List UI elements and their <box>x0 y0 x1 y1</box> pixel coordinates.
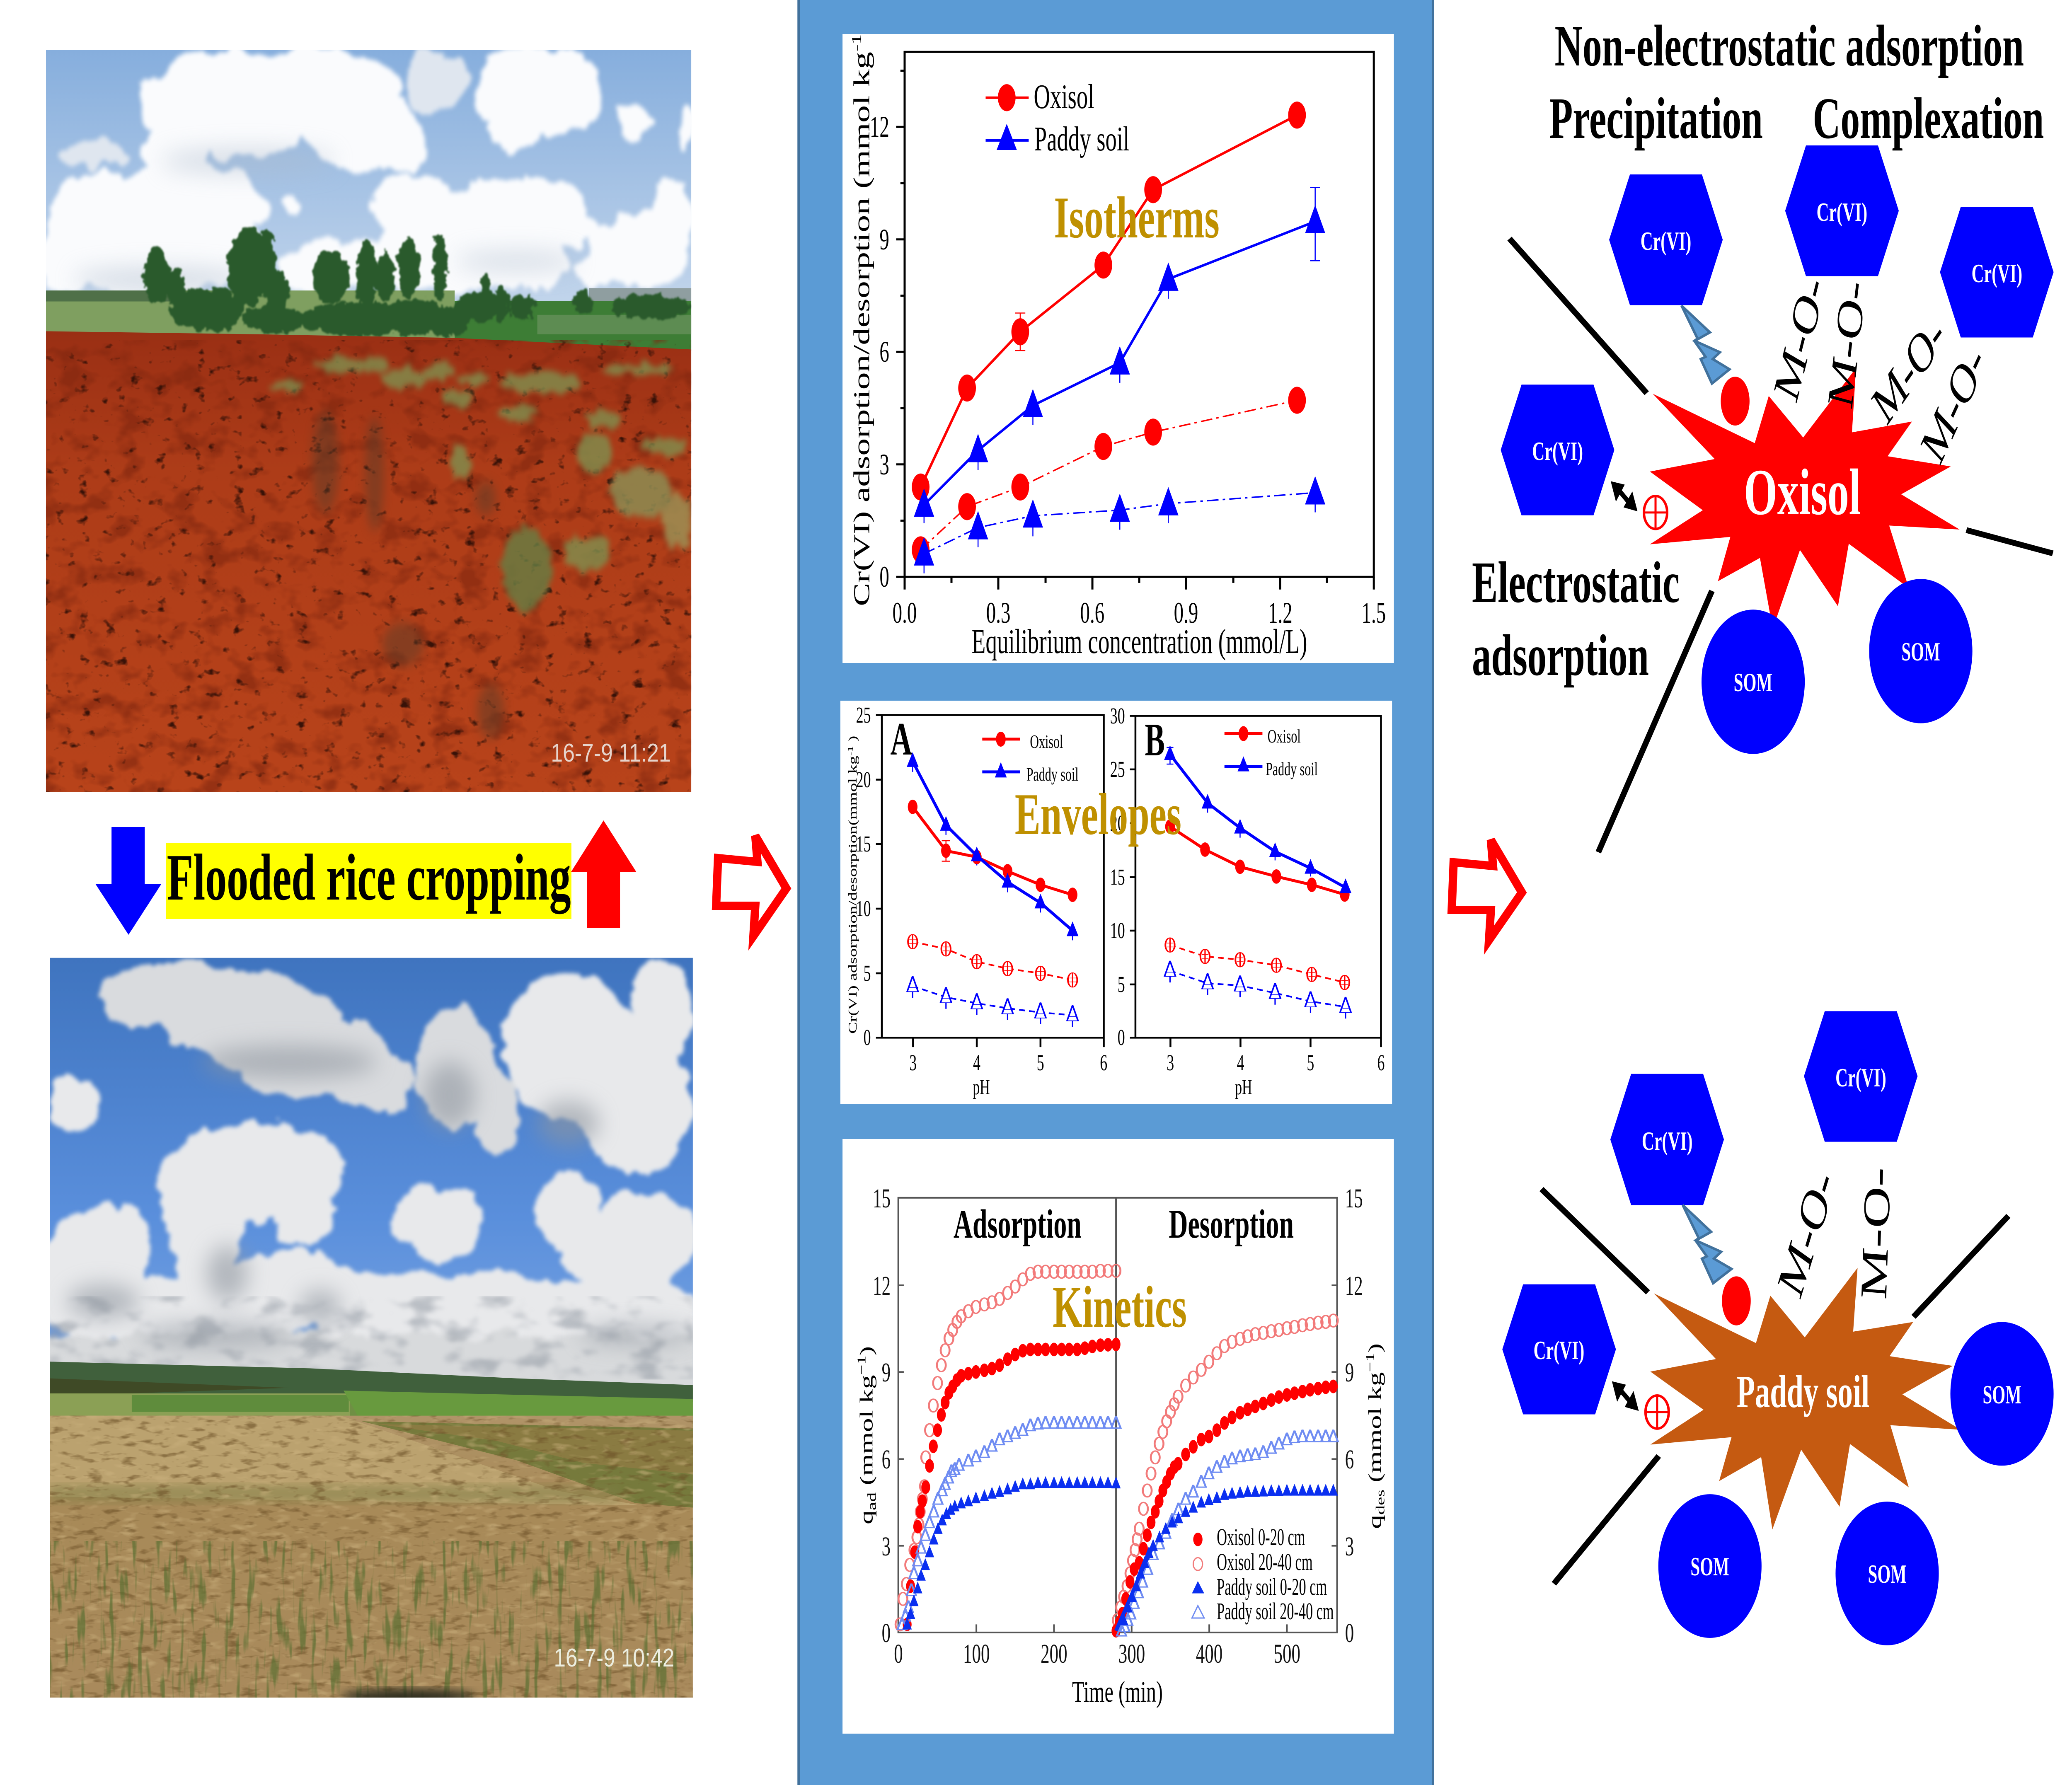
photo: paddy soil rice field <box>36 956 708 1705</box>
y axis title: -1 <box>846 746 854 756</box>
tick labels: 25 <box>856 703 871 728</box>
tick labels: 400 <box>1196 1639 1222 1669</box>
x tick labels: 0.0 <box>893 597 917 630</box>
arrow: red up <box>571 820 637 928</box>
label: flooded rice cropping: Flooded rice cropping <box>167 841 571 914</box>
x tick labels: 0.3 <box>986 597 1010 630</box>
x tick labels: 0.6 <box>1080 597 1104 630</box>
tick labels: 300 <box>1118 1639 1145 1669</box>
tick labels: pH <box>973 1076 990 1099</box>
labels: som <box>1690 1380 2021 1589</box>
tick labels: 100 <box>963 1639 990 1669</box>
tick labels: pH <box>1235 1076 1252 1099</box>
labels: m-o- bonds: M-O- <box>1820 276 1874 413</box>
y tick labels: 6 <box>879 336 889 369</box>
x tick labels <box>893 597 1386 630</box>
legend: Paddy soil 0-20 cm <box>1217 1573 1327 1600</box>
panel letter A: A <box>890 714 912 765</box>
heading: precipitation: Precipitation <box>1549 85 1763 151</box>
tick labels: 3 <box>1345 1531 1354 1562</box>
x tick labels: 1.2 <box>1268 597 1293 630</box>
legends: Paddy soil <box>1026 764 1079 785</box>
labels: m-o- bonds: M-O- <box>1913 333 1994 474</box>
labels: som <box>1734 637 1940 697</box>
labels: som: SOM <box>1690 1552 1729 1581</box>
chart: kinetics <box>842 1139 1394 1734</box>
labels: m-o- bonds: M-O- <box>1864 303 1953 436</box>
arrow: hollow red to charts <box>716 836 787 936</box>
tick labels: 5 <box>1037 1051 1044 1076</box>
panel titles: Adsorption <box>954 1201 1082 1246</box>
right y axis title: ) <box>1365 1343 1385 1353</box>
right y axis title: −1 <box>1364 1353 1377 1372</box>
tick labels: 200 <box>1041 1639 1067 1669</box>
y tick labels: 9 <box>879 223 889 256</box>
tick labels: 0 <box>1345 1618 1354 1648</box>
tick labels: 9 <box>882 1357 891 1388</box>
y axis title: -1 <box>849 34 864 51</box>
photo timestamp: 16-7-9 10:42 <box>554 1644 674 1672</box>
tick labels <box>856 703 1385 1099</box>
legends: Paddy soil <box>1266 759 1318 780</box>
tick labels: 4 <box>1237 1051 1244 1076</box>
photo timestamp: 16-7-9 11:21 <box>551 739 671 767</box>
panel letter B: B <box>1145 715 1165 766</box>
tick labels: 6 <box>1100 1051 1107 1076</box>
heading: complexation: Complexation <box>1813 85 2044 151</box>
legends <box>1026 726 1318 785</box>
label: paddy soil: Paddy soil <box>1737 1367 1869 1417</box>
label: oxisol: Oxisol <box>1744 456 1861 529</box>
labels: cr(vi): Cr(VI) <box>1971 259 2022 288</box>
panel titles <box>954 1201 1294 1246</box>
legend: Paddy soil 20-40 cm <box>1217 1598 1334 1625</box>
y axis title: Cr(VI) adsorption/desorption(mmol kg <box>846 756 859 1034</box>
right y axis title: q <box>1365 1515 1385 1529</box>
x tick labels: 0.9 <box>1174 597 1198 630</box>
tick labels: 3 <box>1167 1051 1174 1076</box>
y tick labels: 12 <box>870 111 889 144</box>
labels: cr(vi): Cr(VI) <box>1835 1063 1886 1092</box>
tick labels: 9 <box>1345 1357 1354 1388</box>
chart: isotherms <box>842 34 1394 663</box>
legend <box>1217 1524 1334 1625</box>
y tick labels: 0 <box>879 561 889 594</box>
left y axis title: −1 <box>855 1356 868 1375</box>
heading: non-electrostatic adsorption: Non-electrostatic adsorption <box>1554 13 2024 78</box>
tick labels: 10 <box>1110 919 1125 943</box>
tick labels: 0 <box>1118 1026 1125 1050</box>
panel: blue chart column <box>797 0 1434 1785</box>
labels: m-o- bonds: M-O- <box>1852 1166 1899 1301</box>
right y axis title: (mmol kg <box>1365 1372 1385 1490</box>
left y axis title: ) <box>857 1346 876 1356</box>
tick labels: 5 <box>1118 972 1125 997</box>
labels: som: SOM <box>1982 1380 2021 1409</box>
y tick labels: 3 <box>879 448 889 481</box>
tick labels: 15 <box>873 1183 891 1214</box>
tick labels: 30 <box>1110 704 1125 729</box>
left y axis title: ad <box>865 1492 879 1510</box>
labels: m-o- bonds <box>1769 1159 1899 1306</box>
x axis title: Equilibrium concentration (mmol/L) <box>972 623 1307 661</box>
tick labels: 6 <box>1345 1444 1354 1475</box>
chart legend <box>1034 78 1129 158</box>
photo: oxisol red soil field <box>36 46 693 792</box>
heading: electrostatic adsorption: adsorption <box>1472 622 1649 688</box>
heading: electrostatic adsorption: Electrostatic <box>1472 549 1680 615</box>
labels: cr(vi) <box>1532 197 2022 466</box>
tick labels: 6 <box>1377 1051 1385 1076</box>
chart legend: Paddy soil <box>1034 120 1129 158</box>
tick labels: 25 <box>1110 757 1125 782</box>
tick labels: 3 <box>909 1051 917 1076</box>
heading: isotherms: Isotherms <box>1054 185 1220 251</box>
tick labels: 0 <box>864 1026 871 1050</box>
labels: cr(vi) <box>1534 1063 1886 1365</box>
right y axis title: des <box>1373 1490 1387 1515</box>
labels: cr(vi): Cr(VI) <box>1534 1335 1584 1365</box>
tick labels: 0 <box>882 1618 891 1648</box>
labels: cr(vi): Cr(VI) <box>1642 1126 1693 1156</box>
labels: m-o- bonds: M-O- <box>1766 267 1834 409</box>
shapes: star, hexagons, circles <box>1501 145 2054 852</box>
heading: envelopes: Envelopes <box>1015 781 1181 847</box>
tick labels: 5 <box>864 961 871 986</box>
tick labels: 4 <box>973 1051 980 1076</box>
chart: envelopes <box>840 701 1392 1104</box>
tick labels: 5 <box>1307 1051 1314 1076</box>
labels: som: SOM <box>1901 637 1940 666</box>
tick labels: 12 <box>873 1271 891 1301</box>
tick labels <box>873 1183 1363 1669</box>
tick labels: 15 <box>856 832 871 857</box>
diagram: oxisol mechanisms <box>1472 13 2054 852</box>
heading: kinetics: Kinetics <box>1053 1274 1187 1340</box>
heading: electrostatic adsorption <box>1472 549 1680 688</box>
tick labels: 12 <box>1345 1271 1363 1301</box>
tick labels: 10 <box>856 897 871 922</box>
y axis title: ) <box>846 736 859 746</box>
labels: cr(vi): Cr(VI) <box>1816 197 1867 227</box>
legends: Oxisol <box>1268 726 1301 747</box>
labels: som: SOM <box>1868 1560 1907 1589</box>
shapes: star, hexagons, circles <box>1502 1011 2054 1645</box>
x tick labels: 1.5 <box>1362 597 1386 630</box>
tick labels: 20 <box>1110 811 1125 836</box>
labels: cr(vi): Cr(VI) <box>1532 436 1583 466</box>
x axis title: Time (min) <box>1072 1676 1163 1709</box>
labels: m-o- bonds <box>1766 267 1994 474</box>
labels: som: SOM <box>1734 668 1772 697</box>
labels: cr(vi): Cr(VI) <box>1641 226 1691 256</box>
legend: Oxisol 0-20 cm <box>1217 1524 1305 1550</box>
arrow: blue down <box>96 827 161 935</box>
tick labels: 500 <box>1273 1639 1300 1669</box>
tick labels: 3 <box>882 1531 891 1562</box>
arrow: hollow red to mechanisms <box>1452 840 1522 940</box>
diagram: paddy soil mechanisms <box>1502 1011 2054 1645</box>
tick labels: 15 <box>1345 1183 1363 1214</box>
chart legend: Oxisol <box>1034 78 1094 116</box>
y tick labels <box>870 111 889 594</box>
tick labels: 20 <box>856 768 871 793</box>
panel titles: Desorption <box>1169 1201 1294 1246</box>
tick labels: 0 <box>894 1639 903 1669</box>
tick labels: 6 <box>882 1444 891 1475</box>
labels: m-o- bonds: M-O- <box>1769 1159 1844 1306</box>
legends: Oxisol <box>1030 731 1063 752</box>
tick labels: 15 <box>1110 865 1125 890</box>
left y axis title: (mmol kg <box>857 1375 876 1492</box>
left y axis title: q <box>857 1510 876 1524</box>
legend: Oxisol 20-40 cm <box>1217 1548 1313 1575</box>
y axis title: Cr(VI) adsorption/desorption (mmol kg <box>850 52 874 606</box>
